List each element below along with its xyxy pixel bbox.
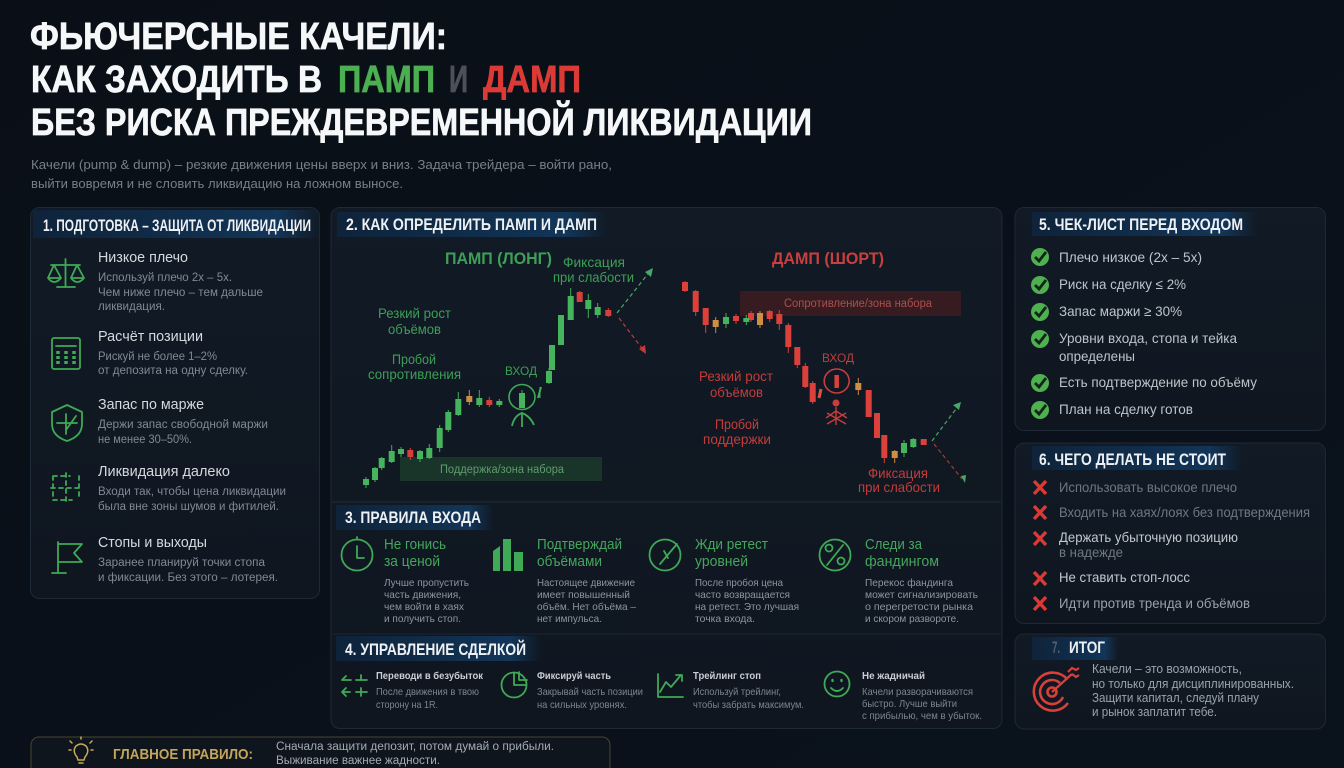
icon: check marks — [1031, 248, 1049, 419]
rule text — [276, 741, 554, 767]
icon: target — [1034, 668, 1079, 711]
rule: do not chase: Лучше пропустить — [384, 577, 470, 589]
item: trailing stop: чтобы забрать максимум. — [693, 699, 804, 711]
heading: trade management: 4. УПРАВЛЕНИЕ СДЕЛКОЙ — [345, 640, 526, 659]
item: take partial: на сильных уровнях. — [537, 699, 627, 711]
icon: shield — [52, 405, 82, 441]
icon: cross marks — [1034, 481, 1046, 610]
rule: confirm with volume: имеет повышенный — [537, 589, 630, 601]
item: stops and exits: и фиксации. Без этого – лотерея. — [98, 572, 278, 584]
rule: watch funding: фандингом — [865, 554, 939, 570]
item: do not be greedy: с прибылью, чем в убыток. — [862, 710, 982, 722]
rule text: Выживание важнее жадности. — [276, 755, 440, 767]
item: liquidation far: была вне зоны шумов и фитилей. — [98, 501, 279, 513]
rule: wait for retest: на ретест. Это лучшая — [695, 601, 799, 613]
item: low leverage — [98, 250, 263, 313]
rule: watch funding: Перекос фандинга — [865, 577, 953, 589]
list of mistakes: в надежде — [1059, 544, 1123, 560]
item: position sizing: Рискуй не более 1–2% — [98, 351, 217, 363]
checklist items — [1059, 249, 1257, 417]
item: trailing stop: Трейлинг стоп — [693, 670, 761, 682]
icon: breakeven arrows — [342, 675, 367, 696]
icon: retest — [650, 540, 680, 570]
checklist items: Риск на сделку ≤ 2% — [1059, 276, 1186, 292]
subtitle: выйти вовремя и не словить ликвидацию на ложном выносе. — [31, 176, 403, 191]
heading: entry rules: 3. ПРАВИЛА ВХОДА — [345, 508, 481, 527]
subtitle: Качели (pump & dump) – резкие движения цены вверх и вниз. Задача трейдера – войти рано, — [31, 157, 612, 172]
icon: smiley — [824, 672, 850, 696]
list of mistakes: Использовать высокое плечо — [1059, 479, 1237, 495]
icon: percent — [820, 540, 850, 570]
heading: how to detect: 2. КАК ОПРЕДЕЛИТЬ ПАМП И ДАМП — [346, 215, 597, 234]
rule: wait for retest: часто возвращается — [695, 589, 790, 601]
item: do not be greedy: Качели разворачиваются — [862, 686, 973, 698]
item: low leverage: Используй плечо 2х – 5х. — [98, 272, 232, 284]
rule label: ГЛАВНОЕ ПРАВИЛО: — [113, 746, 253, 763]
item: breakeven: сторону на 1R. — [376, 699, 438, 711]
item: margin buffer — [98, 397, 268, 446]
rule: do not chase: чем войти в хаях — [384, 601, 465, 613]
checklist items: определены — [1059, 348, 1135, 364]
list of mistakes: Держать убыточную позицию — [1059, 529, 1238, 545]
rule: wait for retest: После пробоя цена — [695, 577, 783, 589]
item: liquidation far: Ликвидация далеко — [98, 464, 230, 480]
list of mistakes: Входить на хаях/лоях без подтверждения — [1059, 504, 1310, 520]
panel: checklist — [1015, 208, 1326, 430]
rule: confirm with volume: Настоящее движение — [537, 577, 635, 589]
item: do not be greedy: Не жадничай — [862, 670, 925, 682]
chart: dump: Сопротивление/зона набора — [784, 298, 933, 310]
chart: pump: при слабости — [553, 269, 634, 285]
checklist items: Запас маржи ≥ 30% — [1059, 303, 1182, 319]
section: trade management — [336, 636, 982, 722]
item: trailing stop — [693, 670, 804, 711]
list of mistakes — [1059, 479, 1310, 611]
chart: pump — [366, 249, 653, 488]
item: position sizing: Расчёт позиции — [98, 329, 203, 345]
item: stops and exits: Заранее планируй точки стопа — [98, 557, 266, 569]
item: margin buffer: не менее 30–50%. — [98, 434, 192, 446]
item: low leverage: Низкое плечо — [98, 250, 188, 266]
title — [30, 16, 812, 144]
item: stops and exits: Стопы и выходы — [98, 535, 207, 551]
checklist items: Уровни входа, стопа и тейка — [1059, 330, 1237, 346]
rule: wait for retest: Жди ретест — [695, 537, 768, 553]
rule: wait for retest: точка входа. — [695, 613, 755, 625]
rule: wait for retest: уровней — [695, 554, 748, 570]
chart: pump: Пробой — [392, 351, 436, 367]
rule: watch funding: о перегретости рынка — [865, 601, 973, 613]
item: do not be greedy: быстро. Лучше выйти — [862, 698, 957, 710]
rule text: Сначала защити депозит, потом думай о прибыли. — [276, 741, 554, 753]
title: ФЬЮЧЕРСНЫЕ КАЧЕЛИ: — [30, 16, 447, 58]
heading: checklist: 5. ЧЕК-ЛИСТ ПЕРЕД ВХОДОМ — [1039, 215, 1243, 234]
panel: 1 preparation — [30, 208, 320, 598]
rule: confirm with volume — [537, 537, 636, 625]
checklist items: План на сделку готов — [1059, 401, 1193, 417]
chart: dump: при слабости — [858, 479, 940, 495]
rule: do not chase: и получить стоп. — [384, 613, 461, 625]
rule: do not chase — [384, 537, 470, 625]
item: low leverage: ликвидация. — [98, 301, 165, 313]
rule: do not chase: Не гонись — [384, 537, 446, 553]
chart: dump: объёмов — [710, 384, 763, 400]
icon: calculator — [52, 338, 80, 369]
chart: pump: Фиксация — [563, 254, 625, 270]
heading: summary — [1052, 638, 1105, 657]
item: breakeven: После движения в твою — [376, 686, 479, 698]
chart: pump: Поддержка/зона набора — [440, 464, 565, 476]
item: liquidation far — [98, 464, 286, 513]
summary text: и рынок заплатит тебе. — [1092, 705, 1217, 719]
icon: liquidation range — [51, 473, 82, 502]
heading: summary: ИТОГ — [1069, 638, 1105, 657]
panel: summary — [1015, 634, 1326, 729]
icon: volume bars — [493, 539, 523, 571]
chart: dump: Резкий рост — [699, 368, 774, 384]
item: margin buffer: Держи запас свободной маржи — [98, 419, 268, 431]
rule: confirm with volume: объёмами — [537, 554, 602, 570]
panel: center — [331, 208, 1002, 728]
rule: confirm with volume: объём. Нет объёма – — [537, 601, 636, 613]
chart: pump: Резкий рост — [378, 305, 452, 321]
rule: watch funding: может сигнализировать — [865, 589, 979, 601]
item: take partial: Закрывай часть позиции — [537, 686, 643, 698]
list of mistakes: Не ставить стоп-лосс — [1059, 569, 1190, 585]
subtitle — [31, 157, 612, 191]
chart: dump: поддержки — [703, 431, 771, 447]
heading: summary: 7. — [1052, 638, 1060, 657]
summary text — [1092, 662, 1294, 719]
summary text: но только для дисциплинированных. — [1092, 677, 1294, 691]
icon: flag — [52, 542, 82, 573]
title: И — [449, 59, 468, 101]
rule: watch funding: и скором развороте. — [865, 613, 959, 625]
item: trailing stop: Используй трейлинг, — [693, 686, 781, 698]
icon: light bulb — [69, 737, 93, 763]
item: position sizing — [98, 329, 248, 377]
summary text: Качели – это возможность, — [1092, 662, 1242, 676]
panel: what not to do — [1015, 443, 1326, 624]
rule: confirm with volume: Подтверждай — [537, 537, 622, 553]
item: do not be greedy — [862, 670, 982, 722]
item: take partial: Фиксируй часть — [537, 670, 611, 682]
title: ПАМП — [338, 59, 435, 101]
list of mistakes: Идти против тренда и объёмов — [1059, 595, 1250, 611]
title: БЕЗ РИСКА ПРЕЖДЕВРЕМЕННОЙ ЛИКВИДАЦИИ — [31, 99, 812, 144]
heading: preparation: 1. ПОДГОТОВКА – ЗАЩИТА ОТ ЛИКВИДАЦИИ — [43, 216, 311, 235]
item: liquidation far: Входи так, чтобы цена ликвидации — [98, 486, 286, 498]
chart: dump: ДАМП (ШОРТ) — [772, 249, 884, 268]
chart: dump: ВХОД — [822, 351, 854, 365]
rule: watch funding — [865, 537, 979, 625]
callout: main rule — [31, 737, 610, 768]
icon: trailing chart — [658, 674, 683, 697]
chart: dump: Фиксация — [868, 465, 928, 481]
checklist items: Есть подтверждение по объёму — [1059, 374, 1257, 390]
rule: do not chase: часть движения, — [384, 589, 461, 601]
rule: wait for retest — [695, 537, 799, 625]
item: take partial — [537, 670, 643, 711]
summary text: Защити капитал, следуй плану — [1092, 691, 1260, 705]
icon: clock — [342, 537, 372, 570]
heading: what not to do: 6. ЧЕГО ДЕЛАТЬ НЕ СТОИТ — [1039, 450, 1226, 469]
title: КАК ЗАХОДИТЬ В — [31, 59, 322, 101]
item: margin buffer: Запас по марже — [98, 397, 204, 413]
title: ДАМП — [483, 59, 581, 101]
rule: confirm with volume: нет импульса. — [537, 613, 602, 625]
rule: do not chase: за ценой — [384, 554, 440, 570]
chart: pump: сопротивления — [368, 366, 461, 382]
item: stops and exits — [98, 535, 278, 584]
item: breakeven: Переводи в безубыток — [376, 670, 484, 682]
chart: pump: ПАМП (ЛОНГ) — [445, 249, 552, 268]
icon: scales — [48, 259, 84, 287]
icon: pie chart — [502, 672, 527, 698]
item: breakeven — [376, 670, 484, 711]
chart: pump: ВХОД — [505, 364, 537, 378]
checklist items: Плечо низкое (2х – 5х) — [1059, 249, 1202, 265]
item: low leverage: Чем ниже плечо – тем дальше — [98, 287, 263, 299]
chart: pump: объёмов — [388, 321, 441, 337]
chart: dump — [685, 249, 966, 495]
chart: dump: Пробой — [715, 416, 759, 432]
rule: watch funding: Следи за — [865, 537, 923, 553]
section: entry rules — [336, 505, 979, 625]
item: position sizing: от депозита на одну сделку. — [98, 365, 248, 377]
